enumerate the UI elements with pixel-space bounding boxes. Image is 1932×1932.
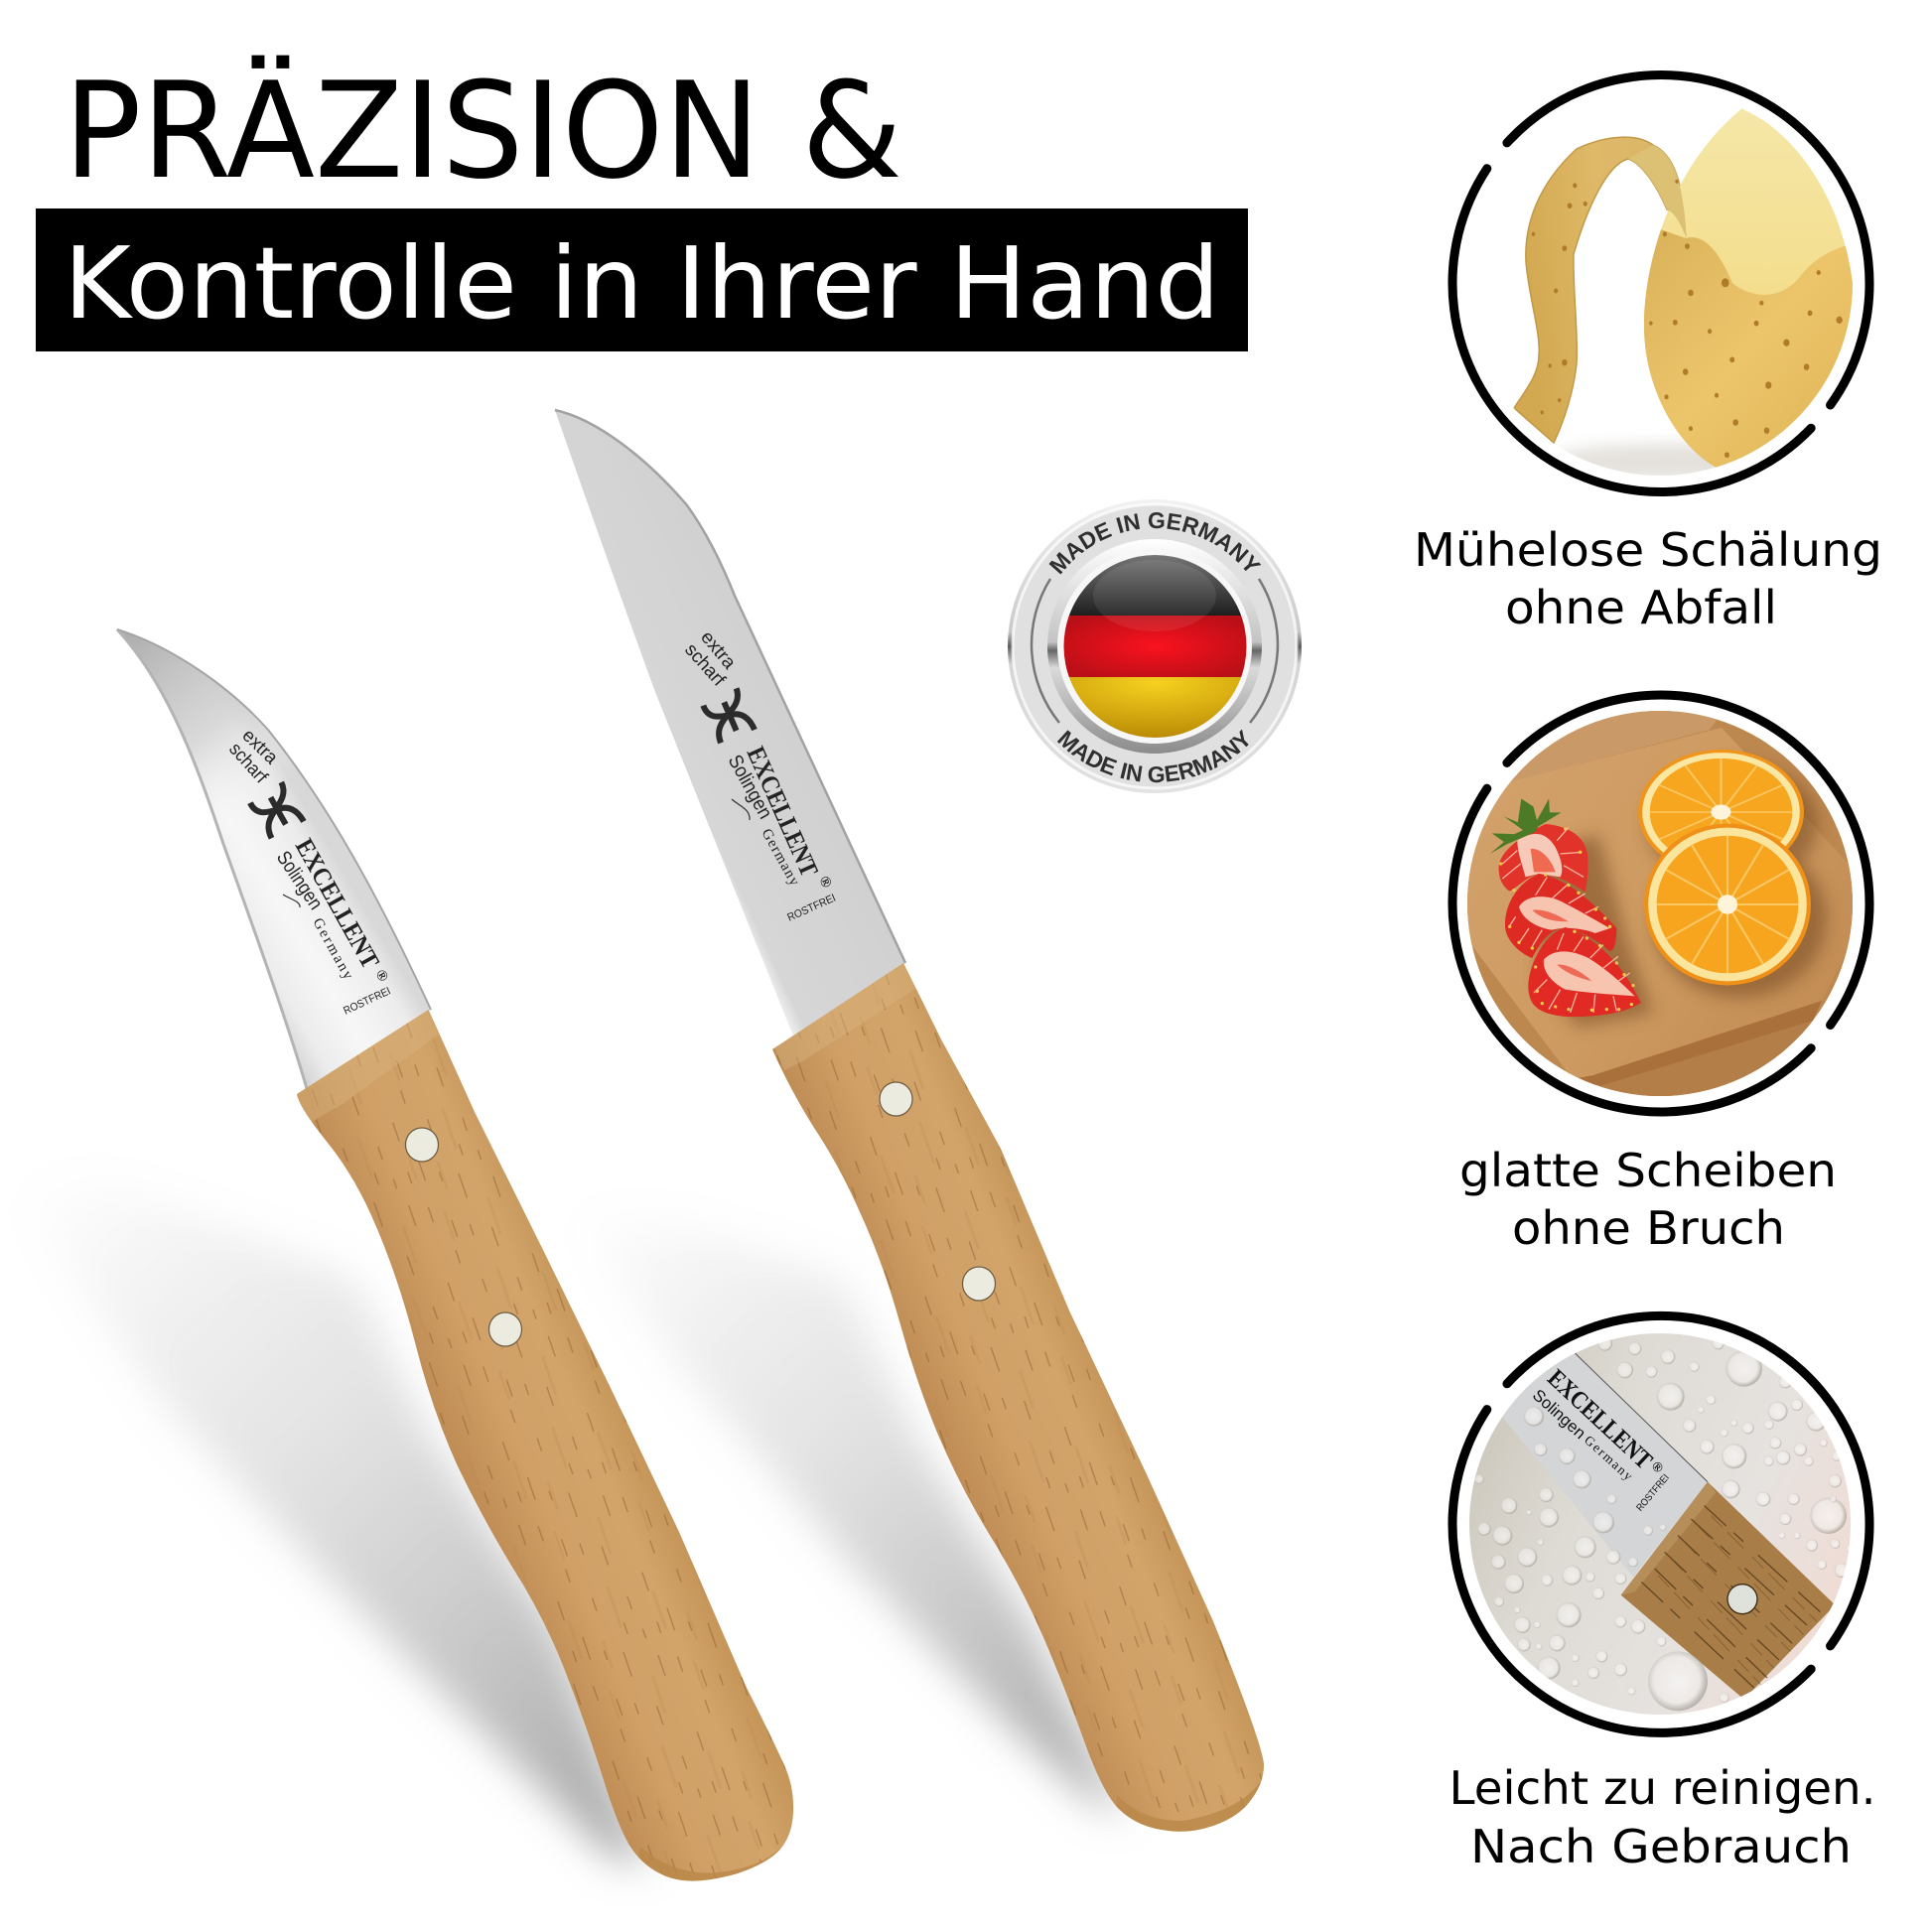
blade lettering right: EXCELLENT <box>742 743 824 881</box>
caption 3: Leicht zu reinigen. <box>1449 1761 1876 1815</box>
blade lettering left: scharf <box>224 739 272 788</box>
blade lettering left: ROSTFREI <box>342 985 392 1018</box>
water droplets <box>1474 1336 1854 1711</box>
wet knife illustration <box>1469 1333 1851 1715</box>
caption 1: ohne Abfall <box>1505 581 1777 634</box>
caption 2 <box>1459 1144 1837 1255</box>
blade lettering: Germany <box>1582 1433 1636 1483</box>
right knife: straight paring knife <box>555 410 1281 1847</box>
caption 1 <box>1414 523 1882 634</box>
wood section <box>1621 1482 1835 1700</box>
handle right <box>755 953 1281 1847</box>
blade lettering: EXCELLENT <box>1542 1364 1658 1474</box>
blade left <box>117 629 431 1096</box>
blade lettering right <box>680 627 838 924</box>
blade lettering right: ROSTFREI <box>785 893 838 924</box>
rivets right <box>880 1082 995 1301</box>
feature: slicing <box>1448 691 1874 1245</box>
cutting board with fruit <box>1467 711 1853 1096</box>
curved seal text <box>1048 512 1261 782</box>
heading line 1: PRÄZISION & <box>64 54 902 208</box>
badge: made in Germany seal <box>1008 499 1302 793</box>
feature: cleaning <box>1448 1311 1874 1863</box>
ring 1 <box>1366 0 1932 578</box>
blade lettering left <box>224 725 392 1018</box>
blade section <box>1503 1354 1708 1577</box>
side arc lines <box>1032 579 1278 723</box>
blade lettering left: extra <box>238 725 282 768</box>
orange slice front <box>1644 824 1811 985</box>
blade lettering left: ® <box>372 967 391 985</box>
left knife: curved paring knife <box>117 629 814 1896</box>
blade lettering: Solingen <box>1529 1386 1589 1443</box>
blade lettering left: Solingen <box>272 847 327 914</box>
blade lettering right: Germany <box>759 826 802 889</box>
blade lettering right: scharf <box>680 639 730 691</box>
feature: peeling <box>1418 70 1878 623</box>
blade lettering: ® <box>1648 1458 1666 1477</box>
curved seal text: MADE IN GERMANY <box>1057 729 1249 782</box>
blade lettering left: EXCELLENT <box>290 834 385 974</box>
curved seal text: MADE IN GERMANY <box>1048 512 1261 574</box>
ring 3 <box>1366 1230 1932 1819</box>
caption 3 <box>1449 1761 1876 1873</box>
handle left <box>297 1010 794 1881</box>
caption 1: Mühelose Schälung <box>1414 523 1882 577</box>
blade lettering right: extra <box>696 627 740 673</box>
ring 2 <box>1366 609 1932 1198</box>
rivet <box>1727 1585 1757 1614</box>
orange slice back <box>1638 750 1804 856</box>
caption 2: ohne Bruch <box>1512 1201 1785 1255</box>
blade lettering right: ® <box>815 874 835 891</box>
heading line 2 on black bar: Kontrolle in Ihrer Hand <box>64 225 1220 342</box>
knife shadows <box>0 1172 1122 1866</box>
blade lettering left: Germany <box>310 915 356 983</box>
potato illustration <box>1514 108 1866 480</box>
German flag sphere <box>1062 554 1249 739</box>
blade lettering right: Solingen <box>724 752 776 823</box>
caption 3: Nach Gebrauch <box>1470 1820 1852 1873</box>
caption 2: glatte Scheiben <box>1459 1144 1837 1197</box>
rivets left <box>405 1128 522 1346</box>
blade right <box>555 410 905 1038</box>
blade lettering: ROSTFREI <box>1635 1472 1672 1514</box>
fruit shadows <box>1539 762 1827 1028</box>
strawberries <box>1490 799 1641 1017</box>
